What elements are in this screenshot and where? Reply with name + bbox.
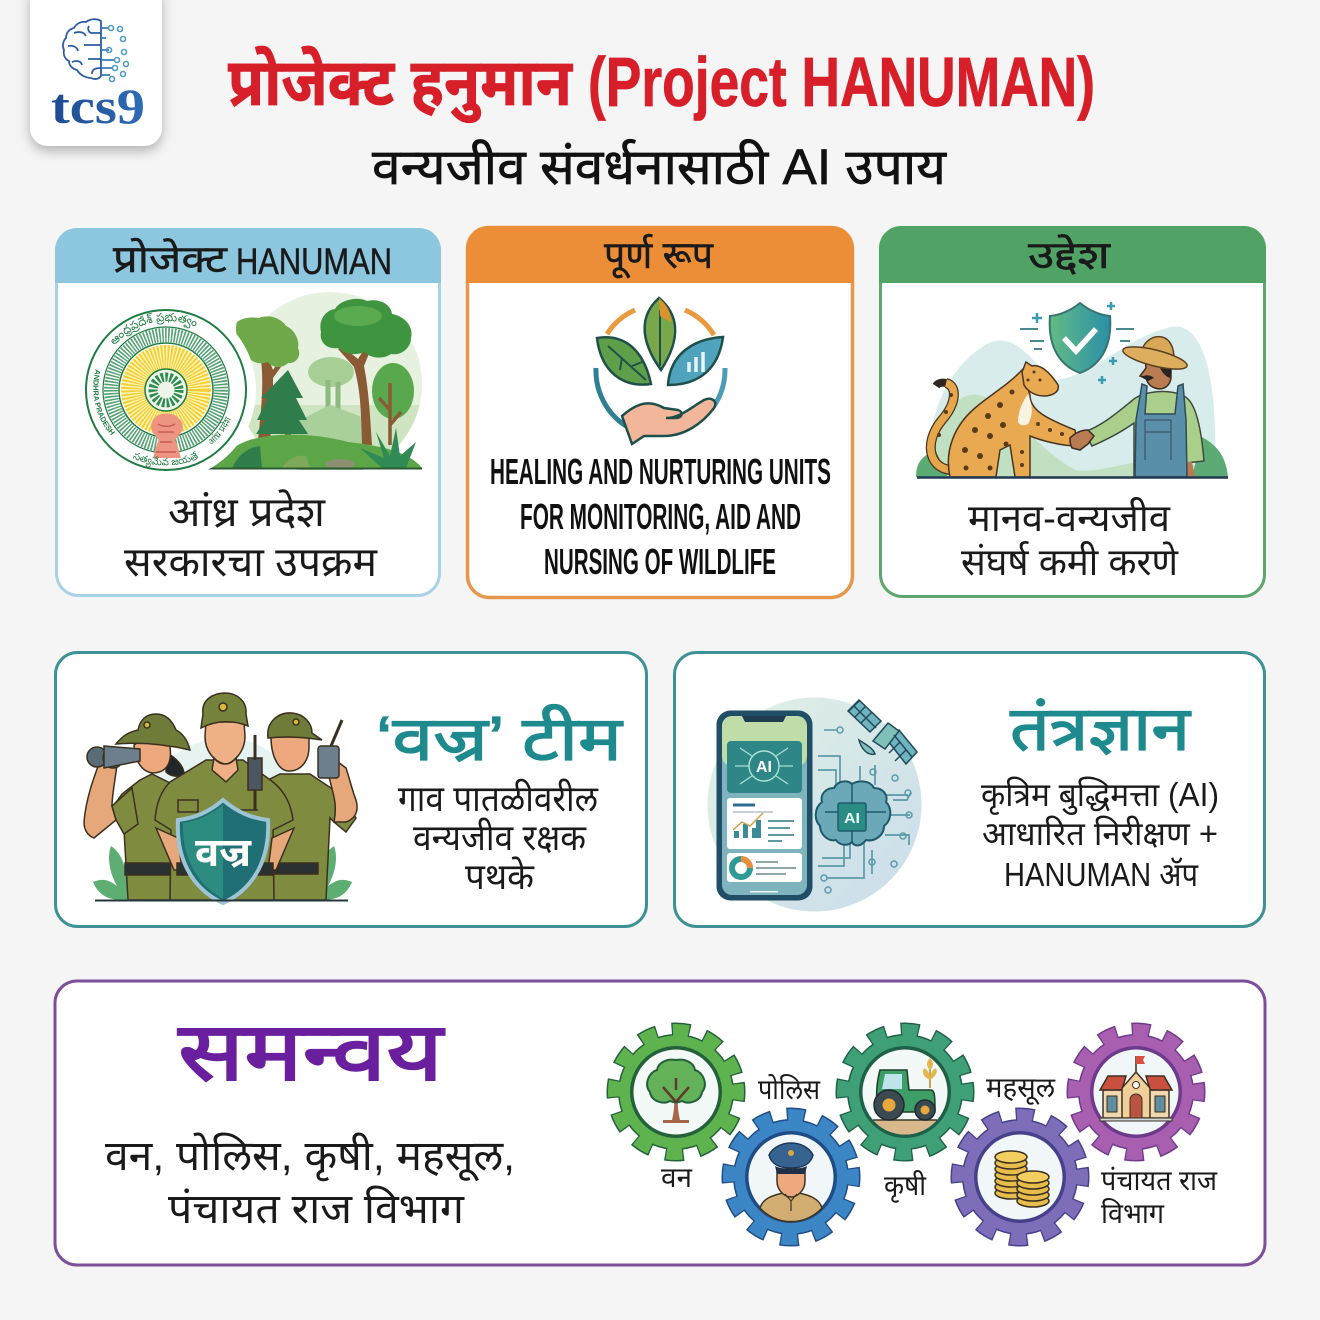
brain chip bbox=[816, 781, 890, 846]
icon: circuit brain bbox=[63, 19, 128, 81]
emblem lettering: ANDHRA PRADESH bbox=[93, 369, 115, 436]
panel text bbox=[124, 488, 378, 585]
panel title: तंत्रज्ञान bbox=[1010, 695, 1192, 764]
shield: vajra bbox=[178, 800, 268, 903]
logo wordmark: tcs9 bbox=[51, 78, 145, 134]
gear: revenue bbox=[951, 1108, 1089, 1246]
panel text: वन्यजीव रक्षक bbox=[413, 817, 587, 858]
satellite bbox=[848, 700, 917, 764]
logo: tcs9 bbox=[30, 0, 162, 146]
gear labels: पोलिस bbox=[758, 1073, 821, 1105]
panel text: वन, पोलिस, कृषी, महसूल, bbox=[105, 1132, 515, 1181]
farmer bbox=[1070, 337, 1204, 477]
description text bbox=[490, 451, 831, 582]
circuit lines bbox=[818, 756, 911, 878]
emblem lettering bbox=[93, 312, 231, 468]
gear labels: पंचायत राज bbox=[1101, 1165, 1218, 1196]
illustration: leopard and farmer handshake bbox=[916, 302, 1228, 478]
panel text bbox=[398, 778, 599, 897]
emblem: Andhra Pradesh seal bbox=[85, 309, 256, 471]
panel text: पथके bbox=[465, 856, 535, 897]
shield label: वज्र bbox=[195, 831, 252, 875]
gear labels: वन bbox=[661, 1162, 692, 1193]
title: प्रोजेक्ट हनुमान bbox=[228, 45, 573, 123]
forest illustration bbox=[208, 290, 430, 470]
heading: प्रोजेक्ट bbox=[113, 237, 228, 281]
gear labels: कृषी bbox=[884, 1169, 927, 1203]
chip AI label: AI bbox=[844, 810, 860, 827]
panel text: सरकारचा उपक्रम bbox=[124, 539, 378, 585]
emblem lettering: आंध्र प्रदेश bbox=[208, 416, 231, 444]
panel text: कृत्रिम बुद्धिमत्ता (AI) bbox=[981, 776, 1219, 815]
panel text: मानव-वन्यजीव bbox=[968, 496, 1171, 540]
phone bbox=[716, 710, 812, 900]
panel header bbox=[879, 226, 1266, 283]
description text: FOR MONITORING, AID AND bbox=[520, 496, 801, 537]
icon: leaves in hand bbox=[596, 298, 725, 444]
description text: HEALING AND NURTURING UNITS bbox=[490, 451, 831, 492]
description text: NURSING OF WILDLIFE bbox=[544, 541, 776, 582]
emblem lettering: ఆంధ్రప్రదేశ్ ప్రభుత్వం bbox=[112, 312, 196, 344]
heading: HANUMAN bbox=[236, 241, 392, 282]
gear: police bbox=[722, 1108, 860, 1246]
panel text: गाव पातळीवरील bbox=[398, 778, 599, 819]
subtitle: वन्यजीव संवर्धनासाठी AI उपाय bbox=[372, 139, 947, 195]
gear labels: विभाग bbox=[1101, 1197, 1165, 1229]
leopard bbox=[931, 362, 1078, 477]
panel: Project HANUMAN bbox=[55, 228, 441, 597]
gear labels bbox=[661, 1072, 1218, 1229]
panel text bbox=[105, 1132, 515, 1232]
panel text: आधारित निरीक्षण + bbox=[982, 815, 1218, 852]
center ranger bbox=[155, 693, 294, 900]
panel: technology bbox=[674, 652, 1264, 926]
icon: officer bbox=[760, 1143, 822, 1222]
heading: पूर्ण रूप bbox=[604, 233, 714, 279]
right ranger bbox=[268, 713, 357, 900]
panel title: ‘वज्र’ टीम bbox=[376, 704, 623, 774]
icon: tractor bbox=[873, 1058, 937, 1135]
gear: agriculture bbox=[836, 1023, 974, 1161]
panel text bbox=[981, 776, 1219, 893]
emblem lion capital bbox=[151, 414, 183, 458]
title bbox=[228, 43, 1095, 123]
panel: objective bbox=[879, 226, 1266, 596]
illustration: AI phone and satellite bbox=[708, 698, 922, 912]
icon: coin stacks bbox=[995, 1151, 1049, 1207]
shield with check bbox=[1020, 302, 1134, 384]
title: (Project HANUMAN) bbox=[588, 43, 1095, 121]
panel text bbox=[961, 496, 1178, 584]
illustration: three rangers bbox=[84, 693, 357, 903]
panel: full form bbox=[466, 226, 854, 598]
phone AI label: AI bbox=[756, 759, 772, 776]
panel header bbox=[466, 226, 854, 283]
left ranger bbox=[84, 714, 190, 900]
icon: tree bbox=[647, 1060, 705, 1123]
gear labels: महसूल bbox=[986, 1072, 1055, 1105]
panel title: समन्वय bbox=[178, 1007, 445, 1098]
gear: forest bbox=[607, 1023, 745, 1161]
panel text: HANUMAN ॲप bbox=[1004, 856, 1199, 893]
panel header bbox=[55, 228, 441, 283]
panel text: आंध्र प्रदेश bbox=[168, 488, 326, 535]
heading: उद्देश bbox=[1028, 233, 1112, 277]
emblem lettering: సత్యమేవ జయతే bbox=[133, 451, 198, 468]
heading bbox=[113, 237, 392, 282]
panel text: पंचायत राज विभाग bbox=[168, 1185, 465, 1232]
icon: building bbox=[1100, 1056, 1172, 1121]
panel text: संघर्ष कमी करणे bbox=[961, 540, 1178, 584]
panel: Vajra team bbox=[56, 652, 646, 926]
panel: coordination bbox=[55, 981, 1265, 1265]
gear: panchayat bbox=[1067, 1023, 1205, 1161]
